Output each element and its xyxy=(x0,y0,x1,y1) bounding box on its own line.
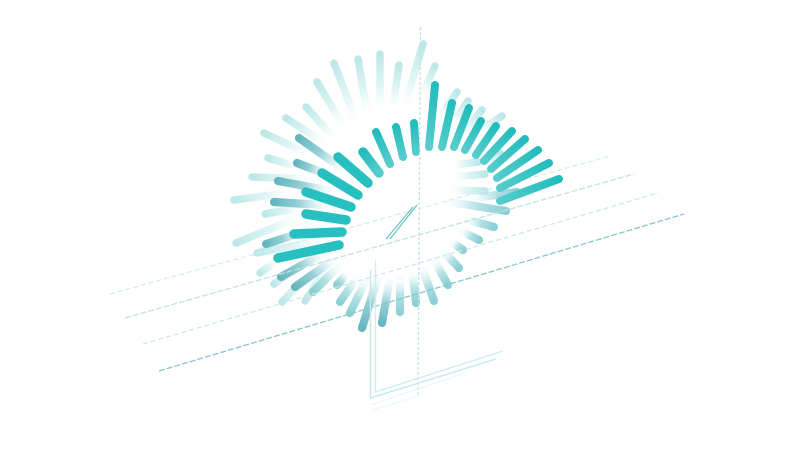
vertical dashed axis xyxy=(418,27,420,395)
centre double tick mark xyxy=(386,205,417,239)
grey-teal fading rays xyxy=(266,138,517,328)
solid teal rays xyxy=(278,85,559,258)
L-shaped bracket lines xyxy=(370,260,503,410)
light background rays xyxy=(234,44,502,302)
diagonal dashed guide lines xyxy=(110,156,684,371)
